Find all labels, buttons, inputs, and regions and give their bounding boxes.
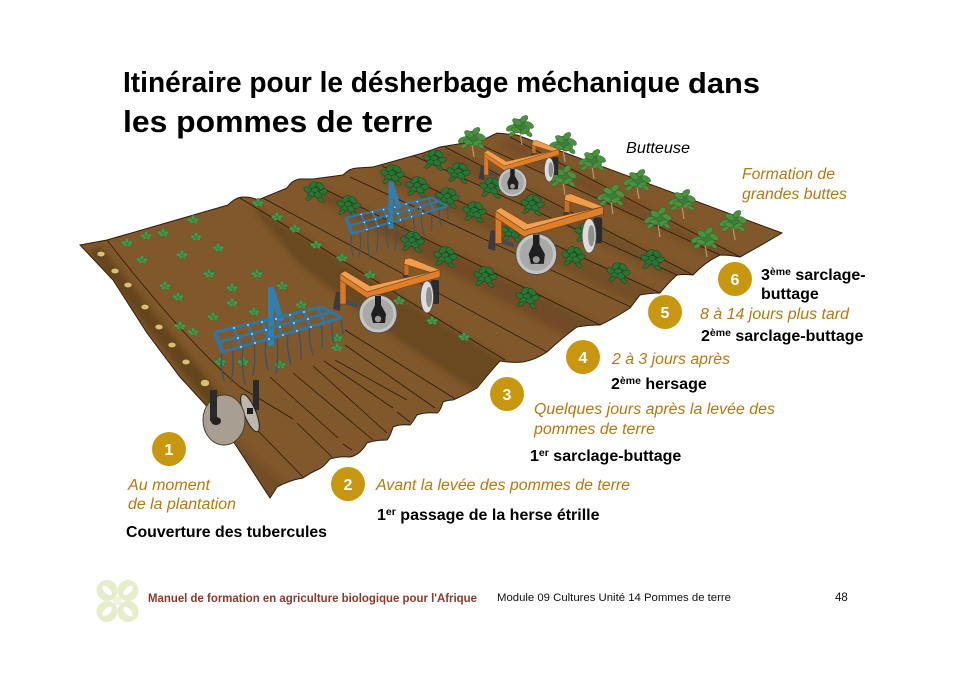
step 5 text: 2 — [701, 328, 710, 345]
potato plants — [303, 148, 665, 309]
badge 1 — [152, 432, 186, 466]
tool: harrow 1 — [215, 287, 343, 384]
badge 3 — [490, 377, 524, 411]
badge 6 — [718, 262, 752, 296]
badge 2: 2 — [344, 477, 353, 494]
step 3 text: er — [539, 447, 549, 459]
tool: ridger 1 — [333, 258, 440, 333]
step 4 text: hersage — [641, 376, 707, 393]
seed potatoes along the first furrow — [97, 251, 210, 386]
footer: module: Module 09 Cultures Unité 14 Pommes de terre — [497, 592, 731, 604]
step 3 text: pommes de terre — [533, 421, 655, 438]
step 2 text — [375, 477, 630, 524]
step 4 text — [611, 351, 730, 393]
step 6 text: ème — [770, 266, 791, 278]
step 5 text — [700, 306, 864, 345]
badge 5 — [648, 295, 682, 329]
step 3 text — [530, 401, 775, 465]
illustration: ridged potato field — [80, 133, 782, 505]
step 5 text: ème — [710, 327, 731, 339]
footer logo — [96, 580, 138, 622]
badge 6: 6 — [731, 272, 740, 289]
footer: page number: 48 — [835, 592, 848, 604]
step 4 text: ème — [620, 375, 641, 387]
label: Butteuse: Butteuse — [626, 140, 690, 157]
step 6 text: buttage — [761, 286, 819, 303]
tool: ridger 3 — [479, 140, 559, 197]
step 6 text: sarclage- — [791, 267, 866, 284]
footer: manual title: Manuel de formation en agriculture biologique pour l'Afrique — [148, 593, 477, 605]
step 5 text: sarclage-buttage — [731, 328, 864, 345]
step 2 text: 1 — [377, 507, 386, 524]
title — [123, 67, 760, 139]
tool: ridger 2 — [488, 194, 603, 275]
tool: harrow 2 — [346, 182, 448, 259]
badge 5: 5 — [661, 305, 670, 322]
title: dans — [688, 68, 760, 100]
tool: covering discs — [203, 380, 263, 445]
step 4 text: 2 à 3 jours après — [611, 351, 730, 368]
step 5 text: 8 à 14 jours plus tard — [700, 306, 850, 323]
step 3 text: 1 — [530, 448, 539, 465]
step 1 text — [126, 477, 327, 541]
title: Itinéraire pour le désherbage méchanique — [123, 67, 680, 99]
step 3 text: Quelques jours après la levée des — [534, 401, 775, 418]
step 2 text: er — [386, 506, 396, 518]
step 6 text — [742, 166, 866, 303]
weed seedlings — [121, 198, 470, 369]
badge 1: 1 — [165, 442, 174, 459]
step 6 text: Formation de — [742, 166, 835, 183]
step 2 text: passage de la herse étrille — [396, 507, 600, 524]
step 6 text: 3 — [761, 267, 770, 284]
step 1 text: Au moment — [127, 477, 211, 494]
step 4 text: 2 — [611, 376, 620, 393]
step 1 text: Couverture des tubercules — [126, 524, 327, 541]
step 3 text: sarclage-buttage — [549, 448, 681, 465]
taller plants on the large ridges — [457, 114, 748, 257]
step 2 text: Avant la levée des pommes de terre — [375, 477, 630, 494]
title: les pommes de terre — [123, 104, 433, 139]
step 6 text: grandes buttes — [742, 186, 847, 203]
badge 2 — [331, 467, 365, 501]
badge 3: 3 — [503, 387, 512, 404]
badge 4: 4 — [579, 350, 588, 367]
step 1 text: de la plantation — [128, 496, 236, 513]
badge 4 — [566, 340, 600, 374]
